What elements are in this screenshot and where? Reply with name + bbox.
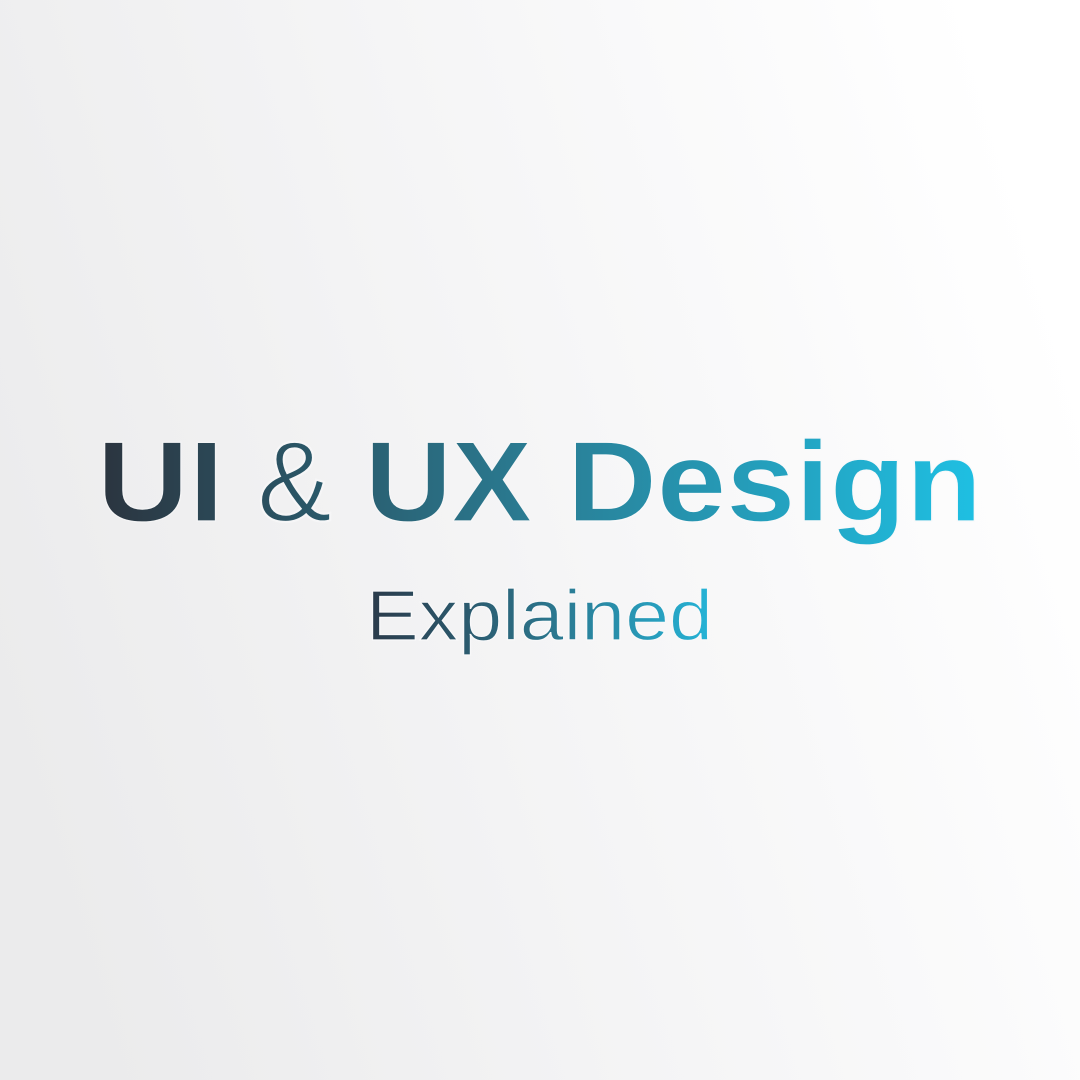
- title: UX: [365, 419, 532, 546]
- title: &: [257, 419, 332, 546]
- title: UI: [97, 419, 224, 546]
- subtitle: Explained: [366, 577, 713, 656]
- title: Design: [567, 419, 982, 546]
- title: [97, 419, 982, 546]
